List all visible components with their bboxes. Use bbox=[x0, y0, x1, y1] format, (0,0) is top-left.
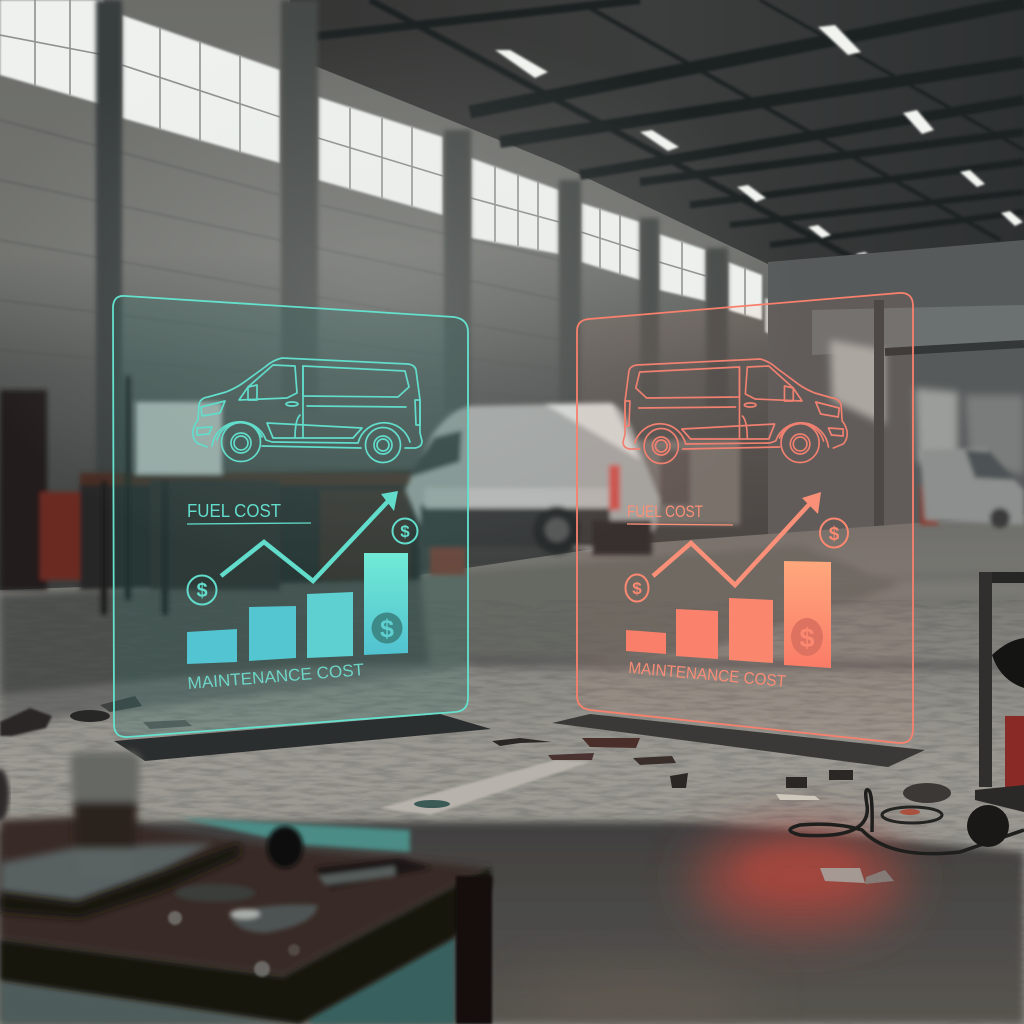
bar chart bbox=[626, 561, 831, 668]
ceiling bbox=[290, 0, 1024, 265]
floor bbox=[0, 515, 1024, 1024]
maintenance cost label: MAINTENANCE COST bbox=[628, 659, 787, 691]
left workshop equipment bbox=[0, 376, 466, 615]
stand base: red panel bbox=[552, 714, 925, 767]
panel: red fuel and maintenance cost bbox=[577, 293, 913, 743]
dollar icon: start of trend: $ bbox=[196, 580, 208, 602]
laptop bbox=[0, 843, 213, 903]
windows bbox=[0, 0, 810, 350]
foreground dark floor bbox=[0, 822, 1024, 1024]
scattered tools on table bbox=[175, 858, 432, 933]
floor strip bbox=[380, 760, 590, 815]
fuel cost underline bbox=[627, 524, 733, 525]
trend arrow bbox=[653, 492, 821, 585]
fuel cost label: FUEL COST bbox=[187, 501, 281, 521]
haze bbox=[0, 20, 800, 580]
floor texture grain bbox=[0, 600, 1024, 1024]
bar chart bbox=[187, 553, 408, 664]
ceiling lights bbox=[495, 25, 1023, 264]
van outline bbox=[623, 359, 847, 464]
window mullions bbox=[0, 0, 745, 315]
dollar icon on bar: $ bbox=[380, 615, 394, 643]
black ball bbox=[267, 826, 303, 868]
columns bbox=[96, 0, 728, 520]
dollar icon: start of trend bbox=[626, 574, 648, 602]
floor disc bbox=[414, 800, 450, 808]
floor label tags bbox=[820, 868, 865, 883]
floor tag small bbox=[865, 870, 894, 884]
dollar icon: end of trend bbox=[392, 518, 418, 544]
panel: teal fuel and maintenance cost bbox=[113, 296, 468, 737]
back wall left bbox=[0, 0, 800, 600]
dollar icon: end of trend bbox=[820, 518, 848, 548]
fuel cost label: FUEL COST bbox=[627, 503, 703, 521]
maintenance cost label: MAINTENANCE COST bbox=[187, 660, 365, 693]
van outline bbox=[193, 358, 422, 462]
floor shadows bbox=[0, 545, 1024, 725]
back wall right bbox=[768, 240, 1024, 535]
dollar icon on bar bbox=[372, 612, 402, 644]
foreground table bbox=[0, 752, 492, 1024]
table top bbox=[0, 817, 490, 977]
trend arrow bbox=[221, 491, 398, 581]
glass pane bbox=[113, 296, 468, 737]
dollar icon: start of trend: $ bbox=[632, 579, 642, 598]
laptop edge bbox=[0, 843, 240, 918]
white van in background bbox=[405, 403, 1024, 555]
floor under table bbox=[310, 937, 455, 1024]
teal floor glow bbox=[180, 818, 410, 852]
dollar icon: end of trend: $ bbox=[829, 524, 840, 545]
coffee cup bbox=[70, 752, 140, 876]
dollar icon on bar bbox=[791, 618, 823, 656]
table front apron bbox=[0, 868, 492, 1024]
floor cable bbox=[790, 790, 1024, 854]
glass pane bbox=[577, 293, 913, 743]
stand base: teal panel bbox=[114, 714, 491, 761]
right cart bbox=[967, 572, 1024, 847]
object at left edge bbox=[0, 769, 9, 821]
wall panel lines bbox=[0, 120, 560, 400]
bokeh dots bbox=[168, 911, 300, 977]
red floor glow bbox=[520, 830, 905, 1024]
fuel cost underline bbox=[187, 523, 311, 524]
dollar icon: end of trend: $ bbox=[400, 522, 410, 541]
dollar icon: start of trend bbox=[188, 576, 216, 604]
table leg bbox=[456, 876, 492, 1024]
floor debris bbox=[0, 696, 951, 823]
dollar icon on bar: $ bbox=[799, 623, 815, 653]
